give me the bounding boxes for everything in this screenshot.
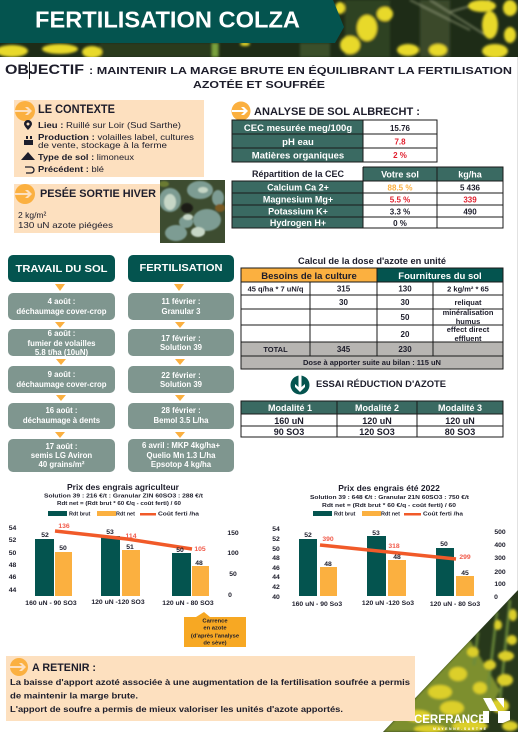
chart: prix des engrais été 2022: 299: [459, 554, 471, 561]
table: modalités: 90 SO3: [274, 427, 304, 437]
flow: travail du sol: 9 août :: [48, 370, 75, 379]
table: répartition de la CEC: 339: [463, 196, 477, 204]
flow: fertilisation: Quelio Mn 1.3 L/ha: [147, 451, 216, 460]
table: CEC: 7.8: [394, 138, 406, 146]
objective heading: OBJECTIF: [5, 61, 85, 77]
flow: travail du sol: 16 août :: [45, 406, 78, 415]
chart: prix des engrais agriculteur: 52: [41, 532, 49, 539]
icon: orange arrow: [15, 101, 35, 121]
table: calcul de la dose d'azote: reliquat: [454, 298, 482, 307]
chart: prix des engrais été 2022: 42: [272, 584, 280, 591]
chart: prix des engrais été 2022: 46: [272, 565, 280, 572]
table: calcul de la dose d'azote: 230: [398, 345, 412, 354]
panel: à retenir: L'apport de soufre a permis de mieux valoriser les unités d'azote apportés.: [10, 704, 343, 714]
chart: prix des engrais été 2022: [272, 483, 506, 608]
chart: prix des engrais été 2022: 200: [494, 569, 506, 576]
flow: travail du sol: TRAVAIL DU SOL: [16, 263, 108, 275]
flow: travail du sol: déchaumage cover-crop: [16, 307, 107, 316]
table: modalités: [241, 401, 503, 437]
chart legend: Coût ferti /ha: [423, 512, 464, 518]
callout: carence en azote: (d'après l'analyse: [191, 634, 240, 640]
table: CEC: [232, 120, 437, 162]
table: répartition de la CEC: Répartition de la CEC: [252, 169, 345, 179]
panel: le contexte: LE CONTEXTE: [38, 104, 115, 116]
flow: fertilisation: [128, 255, 234, 472]
chart: prix des engrais été 2022: Prix des engrais été 2022: [338, 483, 440, 493]
chart: prix des engrais été 2022: 50: [272, 546, 280, 553]
table: répartition de la CEC: 490: [463, 208, 477, 216]
flow: travail du sol: 17 août :: [45, 442, 78, 451]
chart legend: Rdt net: [381, 512, 400, 518]
flow: fertilisation: 22 février :: [161, 371, 201, 380]
table: modalités: 120 uN: [362, 416, 392, 426]
logo: Cerfrance: CERFRANCE: [414, 714, 486, 726]
chart: prix des engrais été 2022: 53: [372, 530, 380, 537]
callout: carence en azote: en azote: [203, 626, 227, 632]
chart legend: Rdt brut: [69, 512, 91, 518]
chart legend: Coût ferti /ha: [158, 512, 200, 518]
chart: prix des engrais agriculteur: Rdt net = (Rdt brut * 60 €/q - coût ferti) / 60: [57, 501, 181, 507]
table: répartition de la CEC: kg/ha: [458, 170, 483, 180]
chart: prix des engrais agriculteur: 136: [58, 523, 70, 530]
table: calcul de la dose d'azote: Besoins de la culture: [261, 271, 357, 282]
flow: fertilisation: Granular 3: [162, 307, 201, 316]
flow: travail du sol: 5.8 t/ha (10uN): [35, 348, 89, 357]
chart: prix des engrais agriculteur: 48: [195, 560, 203, 567]
objective heading: : MAINTENIR LA MARGE BRUTE EN ÉQUILIBRANT LA FERTILISATION: [89, 64, 512, 77]
chart: prix des engrais été 2022: 390: [322, 536, 334, 543]
chart legend: Rdt brut: [334, 512, 356, 518]
table: calcul de la dose d'azote: TOTAL: [263, 345, 288, 354]
icon: green down arrow: [290, 375, 310, 394]
chart: prix des engrais agriculteur: 100: [227, 550, 239, 557]
title banner: [0, 0, 344, 43]
table: calcul de la dose d'azote: 2 kg/m² * 65: [447, 284, 489, 294]
chart legend: [313, 511, 464, 518]
icon: orange arrow: [15, 184, 35, 204]
heading: essai réduction d'azote: [290, 375, 446, 394]
chart: prix des engrais été 2022: 120 uN -120 So3: [362, 600, 414, 607]
table: répartition de la CEC: [232, 167, 503, 228]
table: calcul de la dose d'azote: 345: [337, 345, 351, 354]
chart: prix des engrais agriculteur: 50: [229, 571, 237, 578]
callout: carence en azote: Carrence: [202, 618, 228, 624]
chart: prix des engrais été 2022: 400: [494, 542, 506, 549]
table: CEC: pH eau: [282, 137, 314, 148]
chart: prix des engrais été 2022: 120 uN - 80 So3: [430, 601, 480, 608]
chart: prix des engrais été 2022: 40: [272, 594, 280, 601]
flow: travail du sol: 4 août :: [48, 297, 75, 306]
table: calcul de la dose d'azote: 50: [401, 313, 410, 322]
chart: prix des engrais agriculteur: 105: [194, 546, 206, 553]
chart: prix des engrais été 2022: 48: [393, 554, 401, 561]
flow: fertilisation: Solution 39: [160, 380, 203, 389]
flow: fertilisation: 11 février :: [161, 297, 201, 306]
panel: à retenir: de maintenir la marge brute.: [10, 690, 138, 700]
flow: fertilisation: Epsotop 4 kg/ha: [151, 460, 212, 469]
panel: le contexte: de vente, stockage à la ferme: [38, 140, 167, 150]
panel: pesée sortie hiver: 130 uN azote piégées: [18, 220, 113, 230]
table: modalités: Modalité 1: [268, 403, 312, 413]
table: répartition de la CEC: 5 436: [460, 184, 481, 192]
table: modalités: 120 SO3: [359, 427, 395, 437]
logo: Cerfrance: [414, 698, 510, 731]
table: calcul de la dose d'azote: 30: [339, 298, 348, 307]
flow: travail du sol: fumier de volailles: [27, 339, 96, 348]
chart: prix des engrais agriculteur: 44: [9, 587, 16, 594]
table: calcul de la dose d'azote: [241, 256, 503, 369]
heading: essai réduction d'azote: ESSAI RÉDUCTION D'AZOTE: [316, 379, 446, 390]
table: calcul de la dose d'azote: Dose à apporter suite au bilan : 115 uN: [303, 358, 441, 367]
table: calcul de la dose d'azote: effect direct: [447, 325, 490, 334]
heading: analyse de sol: [232, 102, 420, 120]
table: répartition de la CEC: 5.5 %: [390, 196, 410, 204]
bars: [299, 536, 474, 596]
table: calcul de la dose d'azote: Fournitures du sol: [398, 271, 482, 282]
flow: travail du sol: semis LG Aviron: [31, 451, 92, 460]
callout: carence en azote: [184, 612, 246, 647]
flow: fertilisation: 17 février :: [161, 334, 201, 343]
chart: prix des engrais été 2022: 48: [272, 555, 280, 562]
corner photo: rapeseed flowers: [380, 588, 518, 732]
chart: prix des engrais agriculteur: 52: [9, 537, 16, 544]
chart: prix des engrais été 2022: 100: [494, 581, 506, 588]
chart: prix des engrais agriculteur: 46: [9, 574, 16, 581]
bars: [35, 536, 209, 596]
chart: prix des engrais agriculteur: 51: [126, 544, 134, 551]
chart: prix des engrais agriculteur: 0: [228, 592, 232, 599]
chart: prix des engrais agriculteur: 150: [227, 530, 239, 537]
table: modalités: Modalité 3: [438, 403, 482, 413]
photo: colza leaves: [159, 180, 225, 243]
panel: pesée sortie hiver: PESÉE SORTIE HIVER: [40, 187, 156, 200]
chart: prix des engrais agriculteur: 120 uN - 80 SO3: [162, 600, 214, 607]
chart: prix des engrais été 2022: Rdt net = (Rdt brut * 60 €/q - coût ferti) / 60: [322, 503, 456, 509]
flow: fertilisation: 6 avril : MKP 4kg/ha+: [142, 441, 220, 450]
table: calcul de la dose d'azote: Calcul de la dose d'azote en unité: [298, 256, 446, 266]
chart: prix des engrais été 2022: 50: [440, 541, 448, 548]
chart: prix des engrais agriculteur: 120 uN -120 SO3: [91, 599, 145, 606]
table: répartition de la CEC: Votre sol: [381, 170, 419, 180]
flow: fertilisation: Solution 39: [160, 343, 203, 352]
panel: à retenir: La baisse d'apport azoté associée à une augmentation de la fertilisation soufrée a permis: [10, 677, 410, 687]
chart: prix des engrais agriculteur: 53: [106, 529, 114, 536]
flow: travail du sol: [8, 255, 115, 472]
chart: prix des engrais été 2022: 44: [272, 574, 280, 581]
table: répartition de la CEC: 0 %: [393, 219, 407, 228]
chart: prix des engrais agriculteur: Prix des engrais agriculteur: [67, 482, 180, 492]
table: modalités: 160 uN: [274, 416, 304, 426]
panel: le contexte: [14, 100, 204, 177]
chart: prix des engrais agriculteur: 50: [176, 547, 184, 554]
panel: à retenir: A RETENIR :: [32, 662, 96, 674]
table: CEC: 2 %: [393, 151, 407, 160]
table: répartition de la CEC: Potassium K+: [268, 206, 328, 216]
objective heading: AZOTÉE ET SOUFRÉE: [193, 78, 325, 91]
chart: prix des engrais été 2022: 160 uN - 90 So3: [292, 601, 342, 608]
table: modalités: 120 uN: [445, 416, 475, 426]
logo: Cerfrance: MAYENNE-SARTHE: [433, 727, 487, 731]
chart: prix des engrais été 2022: 54: [272, 526, 280, 533]
panel: le contexte: Précédent : blé: [38, 164, 104, 174]
table: calcul de la dose d'azote: 20: [401, 330, 410, 339]
table: répartition de la CEC: Magnesium Mg+: [263, 194, 333, 204]
chart: prix des engrais agriculteur: 50: [9, 550, 16, 557]
chart: prix des engrais été 2022: Solution 39 : 648 €/t : Granular 21N 60SO3 : 750 €/t: [310, 495, 469, 501]
panel: pesée sortie hiver: [14, 184, 160, 233]
chart: prix des engrais été 2022: 48: [324, 561, 332, 568]
chart: prix des engrais été 2022: 300: [494, 555, 506, 562]
table: calcul de la dose d'azote: minéralisation: [443, 308, 494, 317]
chart: prix des engrais été 2022: 52: [272, 536, 280, 543]
chart: prix des engrais agriculteur: 160 uN - 90 SO3: [25, 600, 77, 607]
header photo: rapeseed flowers: [0, 0, 518, 58]
chart: prix des engrais agriculteur: Solution 39 : 216 €/t : Granular ZIN 60SO3 : 288 €/t: [44, 494, 203, 500]
chart: prix des engrais agriculteur: 50: [59, 545, 67, 552]
flow: travail du sol: déchaumage à dents: [23, 416, 101, 425]
flow: fertilisation: FERTILISATION: [140, 262, 222, 274]
heading: analyse de sol: ANALYSE DE SOL ALBRECHT :: [254, 106, 420, 118]
chart: prix des engrais agriculteur: 48: [9, 562, 16, 569]
table: répartition de la CEC: Calcium Ca 2+: [267, 182, 329, 192]
table: calcul de la dose d'azote: 30: [401, 298, 410, 307]
panel: à retenir: [6, 656, 415, 721]
table: calcul de la dose d'azote: humus: [456, 317, 480, 326]
table: calcul de la dose d'azote: 315: [337, 284, 351, 294]
table: calcul de la dose d'azote: effluent: [454, 334, 482, 343]
chart: prix des engrais été 2022: 318: [388, 543, 400, 550]
flow: travail du sol: 40 grains/m²: [39, 460, 85, 469]
chart: prix des engrais été 2022: 52: [304, 532, 312, 539]
chart: prix des engrais été 2022: 45: [461, 570, 469, 577]
panel: le contexte: Lieu : Ruillé sur Loir (Sud Sarthe): [38, 120, 181, 130]
chart: prix des engrais agriculteur: 114: [126, 533, 137, 540]
table: modalités: 80 SO3: [445, 427, 475, 437]
chart: prix des engrais agriculteur: 54: [9, 525, 16, 532]
table: répartition de la CEC: 3.3 %: [390, 208, 410, 216]
flow: fertilisation: 28 février :: [161, 406, 201, 415]
flow: travail du sol: 6 août :: [48, 329, 75, 338]
chart: prix des engrais agriculteur: [9, 482, 239, 607]
chart: prix des engrais été 2022: 500: [494, 529, 506, 536]
table: répartition de la CEC: Hydrogen H+: [270, 218, 326, 228]
flow: travail du sol: déchaumage cover-crop: [16, 380, 107, 389]
table: répartition de la CEC: 88.5 %: [388, 184, 412, 192]
table: CEC: CEC mesurée meg/100g: [244, 123, 352, 134]
table: CEC: Matières organiques: [252, 150, 344, 162]
panel: le contexte: Type de sol : limoneux: [38, 152, 135, 162]
chart legend: Rdt net: [116, 512, 135, 518]
title banner: FERTILISATION COLZA: [35, 6, 300, 32]
chart legend: [48, 511, 200, 518]
chart: prix des engrais été 2022: 0: [494, 594, 498, 601]
table: calcul de la dose d'azote: 130: [398, 284, 412, 294]
flow: fertilisation: Bemol 3.5 L/ha: [153, 416, 209, 425]
callout: carence en azote: de sève): [203, 640, 227, 646]
panel: le contexte: Production : volailles label, cultures: [38, 132, 194, 142]
table: modalités: Modalité 2: [355, 403, 399, 413]
objective heading: [5, 61, 512, 91]
panel: pesée sortie hiver: 2 kg/m²: [18, 210, 47, 220]
icon: orange arrow: [10, 658, 28, 676]
icon: orange arrow: [232, 102, 250, 120]
table: CEC: 15.76: [390, 124, 411, 133]
table: calcul de la dose d'azote: 45 q/ha * 7 uN/q: [248, 284, 304, 294]
